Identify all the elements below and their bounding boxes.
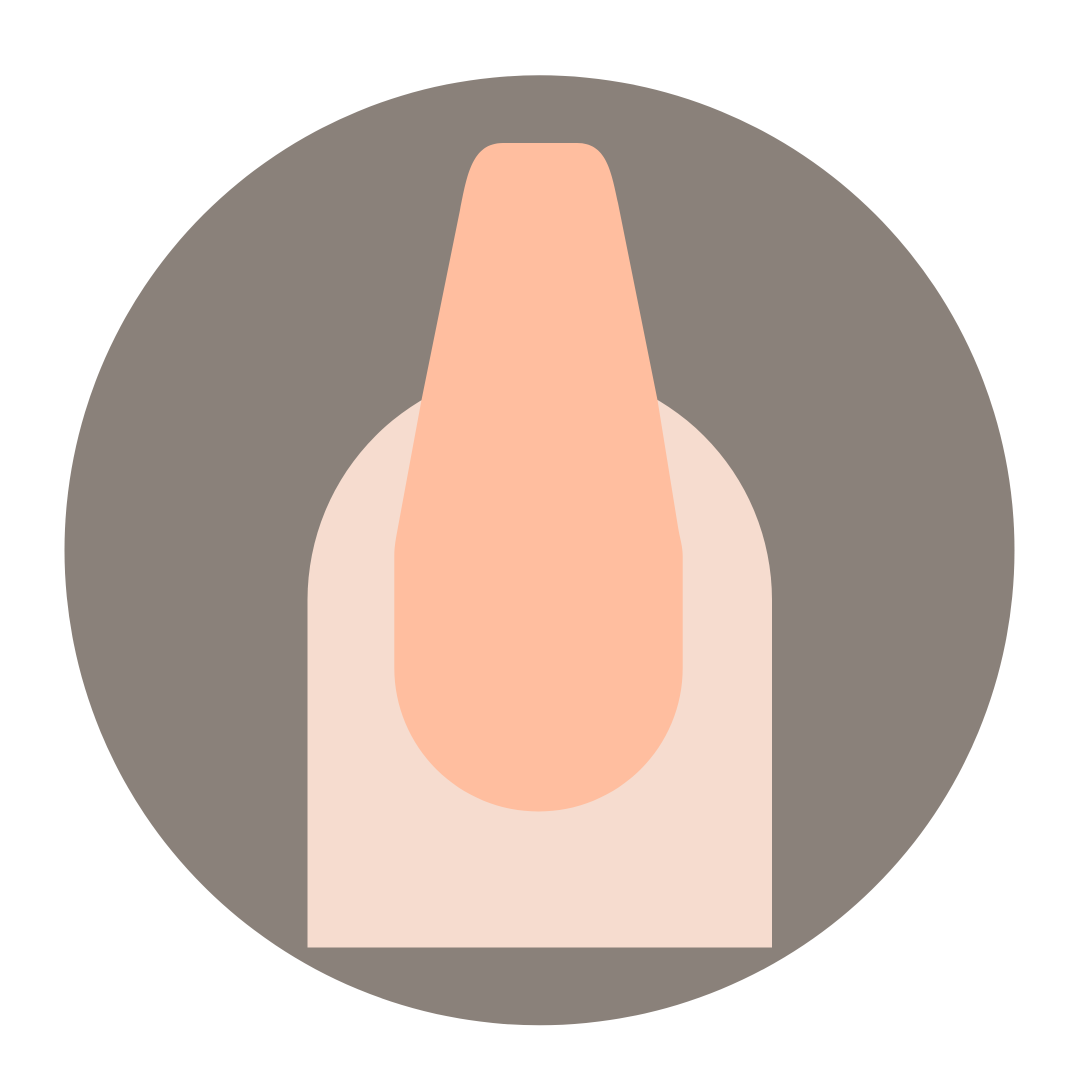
- nail: [394, 143, 683, 812]
- background circle: [64, 75, 1014, 1025]
- finger: [308, 368, 772, 948]
